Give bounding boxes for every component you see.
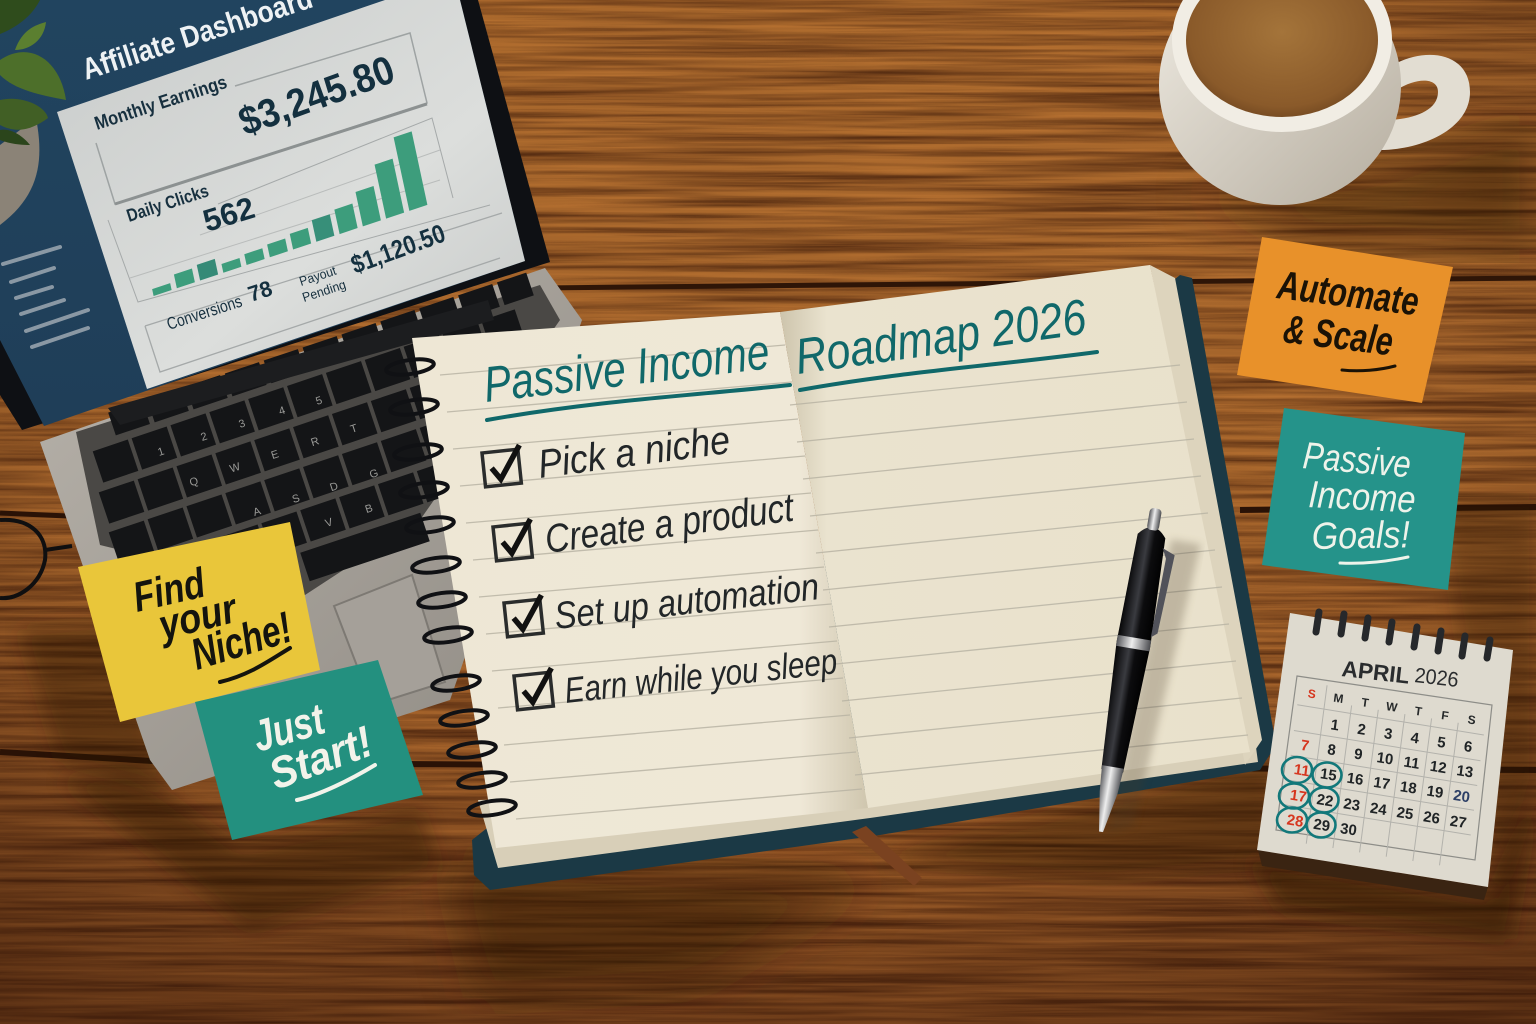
date cells: 20	[1452, 787, 1471, 806]
key labels: A	[252, 505, 263, 519]
date cells: 16	[1346, 770, 1364, 789]
date cells: 18	[1399, 778, 1418, 798]
page stack right	[1150, 265, 1262, 765]
ruled lines	[440, 345, 1248, 819]
date cells: 10	[1376, 749, 1394, 769]
date cells: 30	[1339, 820, 1358, 840]
date cells: 17	[1372, 774, 1391, 793]
sticky note: passive income goals: Goals!	[1311, 514, 1411, 558]
teal date circles	[1277, 757, 1342, 838]
dashboard white panel	[57, 0, 525, 389]
payout pending	[297, 218, 449, 305]
notebook cover	[472, 275, 1276, 890]
key labels: E	[270, 448, 280, 462]
coffee	[1186, 0, 1378, 117]
date cells: 9	[1353, 745, 1364, 764]
calendar grid	[1276, 676, 1492, 860]
date cells: T	[1414, 704, 1424, 719]
sticky note: find your niche: Find	[128, 559, 210, 621]
date cells: W	[1385, 699, 1399, 715]
daily clicks chart: Daily Clicks	[124, 181, 211, 226]
plant in pot	[0, 0, 66, 225]
bars	[138, 131, 427, 296]
date cells: 17	[1289, 787, 1308, 806]
item: earn while you sleep: Earn while you sleep	[562, 640, 839, 711]
date cells	[1280, 681, 1487, 870]
sidebar menu lines	[3, 247, 88, 347]
date cells: M	[1333, 691, 1344, 706]
item: set up automation: Set up automation	[552, 566, 821, 638]
monthly earnings panel: Monthly Earnings	[92, 72, 230, 135]
date cells: 27	[1449, 813, 1468, 832]
daily clicks chart: 562	[199, 190, 259, 239]
desk calendar: 2026	[1413, 664, 1460, 692]
dashboard screen blue frame	[0, 0, 525, 426]
key labels: T	[349, 422, 359, 436]
date cells: F	[1441, 708, 1450, 723]
item: create a product	[493, 485, 798, 562]
key labels: 1	[156, 445, 166, 459]
date cells: 7	[1300, 737, 1310, 755]
checklist	[482, 418, 839, 711]
calendar backing	[1258, 850, 1488, 900]
pot	[0, 118, 39, 225]
laptop	[0, 0, 582, 790]
conversions box	[145, 213, 502, 372]
key labels: R	[309, 435, 321, 449]
month heading: APRIL	[1340, 656, 1411, 689]
trackpad	[334, 575, 445, 705]
date cells: 26	[1422, 808, 1441, 828]
sticky note: just start: Just	[247, 694, 332, 762]
date cells: 5	[1436, 734, 1447, 752]
notebook	[385, 265, 1276, 890]
cup handle	[1380, 55, 1470, 150]
date cells: 22	[1316, 791, 1334, 811]
pen tip	[1091, 765, 1124, 834]
key labels	[156, 394, 380, 530]
date cells: 2	[1356, 721, 1367, 739]
date cells: 1	[1330, 716, 1340, 735]
desk calendar	[1257, 612, 1513, 900]
sticky note: just start: Start!	[263, 717, 379, 799]
key labels: 5	[314, 394, 324, 408]
sticky note: passive income goals: Income	[1308, 474, 1417, 522]
pen shadow	[1107, 537, 1201, 840]
notebook heading	[481, 289, 1097, 420]
date cells: 8	[1326, 741, 1337, 759]
eyeglasses	[0, 520, 72, 598]
date cells: 6	[1463, 738, 1473, 756]
conversions box: Conversions	[164, 292, 244, 334]
item: pick a niche: Pick a niche	[535, 418, 733, 487]
sticky note: passive income goals: Passive	[1301, 435, 1412, 486]
key labels: 4	[277, 404, 287, 418]
date cells: S	[1467, 712, 1477, 727]
cup body	[1159, 0, 1401, 205]
monthly earnings panel: $3,245.80	[233, 48, 400, 144]
hinge	[108, 300, 494, 425]
keyboard keys	[98, 284, 530, 578]
screen bezel	[0, 0, 550, 430]
date cells: 25	[1396, 804, 1414, 823]
laptop base	[40, 268, 582, 790]
payout pending: Pending	[300, 277, 348, 305]
key labels: B	[364, 502, 374, 516]
date cells: 24	[1369, 800, 1388, 819]
page stack bottom	[478, 740, 1258, 868]
key labels: W	[228, 461, 242, 475]
spiral rings	[385, 357, 517, 818]
date cells: 12	[1429, 758, 1448, 777]
leaves	[0, 0, 66, 145]
right page	[780, 265, 1250, 808]
conversions box: 78	[245, 276, 275, 307]
payout pending: Payout	[297, 263, 338, 289]
item: create a product: Create a product	[542, 485, 798, 562]
pen	[1085, 506, 1205, 840]
pen clip	[1148, 548, 1176, 639]
sticky note: automate and scale	[1237, 237, 1453, 403]
sticky note: automate and scale: & Scale	[1281, 307, 1395, 364]
item: pick a niche	[482, 418, 733, 487]
date cells: 15	[1319, 765, 1338, 785]
monthly earnings panel	[92, 33, 427, 204]
daily clicks chart	[108, 118, 490, 302]
coffee cup	[1159, 0, 1470, 205]
sticky note: find your niche: Niche!	[186, 603, 297, 680]
date cells: 13	[1456, 762, 1474, 782]
notebook heading: Passive Income	[481, 323, 772, 413]
date cells: 3	[1383, 725, 1393, 743]
date cells: 19	[1426, 783, 1444, 802]
calendar page	[1257, 613, 1513, 887]
sticky note: passive income goals	[1262, 408, 1465, 590]
key labels: 3	[237, 417, 247, 431]
cup rim	[1172, 0, 1392, 132]
date cells: 11	[1293, 761, 1311, 780]
notebook heading: Roadmap 2026	[792, 289, 1090, 385]
key labels: Q	[188, 475, 200, 489]
pen barrel	[1095, 524, 1170, 774]
sticky note: find your niche: your	[152, 584, 243, 649]
key labels: G	[368, 467, 380, 481]
date cells: 4	[1410, 729, 1421, 748]
left page	[412, 312, 868, 848]
keyboard well	[76, 285, 560, 595]
key labels: D	[328, 480, 340, 494]
sticky note: just start	[195, 660, 423, 840]
date cells: 28	[1286, 811, 1304, 831]
date cells: S	[1307, 686, 1317, 702]
sticky note: automate and scale: Automate	[1274, 263, 1421, 324]
date cells: 23	[1342, 795, 1361, 815]
date cells: 11	[1403, 754, 1421, 773]
item: earn while you sleep	[514, 640, 839, 711]
pen centre band	[1116, 635, 1151, 651]
key labels: S	[291, 492, 301, 506]
payout pending: $1,120.50	[347, 218, 449, 280]
sticky note: find your niche	[78, 522, 320, 722]
bookmark ribbon	[852, 826, 922, 886]
key labels: V	[324, 516, 335, 530]
key labels: 2	[199, 430, 209, 444]
date cells: 29	[1312, 816, 1331, 835]
pen top cap	[1147, 508, 1162, 531]
binding rings	[1316, 612, 1490, 658]
date cells: T	[1361, 695, 1370, 710]
